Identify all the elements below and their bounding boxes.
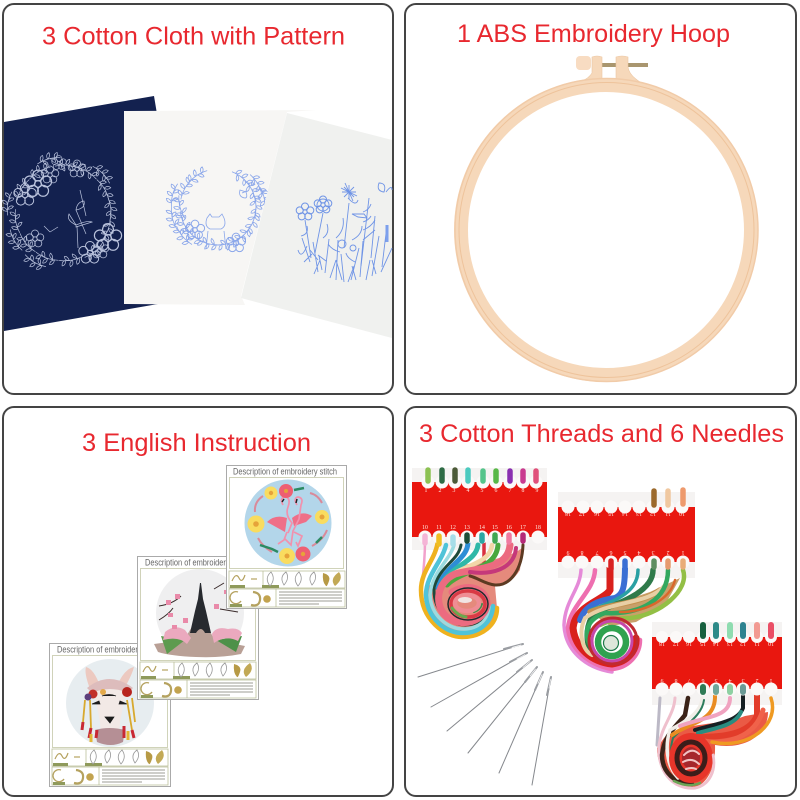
instruction sheet: alpaca: Description of embroidery stitch (57, 644, 161, 656)
needles (418, 644, 551, 785)
instruction sheet: Eiffel tower: Description of embroidery stitch (145, 558, 249, 568)
thread card 3: 13 (727, 640, 733, 646)
heading: embroidery hoop: 1 ABS Embroidery Hoop (457, 20, 730, 48)
thread card 1: 15 (492, 525, 498, 531)
heading: instructions: 3 English Instruction (82, 429, 311, 457)
thread card 1 (412, 468, 547, 637)
panel: threads and needles (405, 407, 796, 796)
thread bundle 2 (564, 566, 684, 672)
thread card 3 (652, 622, 782, 788)
thread card 3: 12 (740, 640, 746, 646)
thread card 2: 1 (681, 549, 684, 555)
thread card 3: 3 (741, 677, 744, 683)
instruction sheet: Eiffel tower (138, 556, 258, 700)
thread card 3: 4 (728, 677, 731, 683)
thread card 3: 8 (674, 677, 677, 683)
thread card 1: 7 (509, 488, 512, 494)
thread card 3: 16 (686, 640, 692, 646)
thread card 1: 16 (506, 525, 512, 531)
panel: instructions (3, 407, 393, 796)
instruction sheet: flamingos: Description of embroidery stitch (233, 466, 337, 478)
navy cloth with wreath (0, 96, 158, 331)
thread card 1: 18 (535, 525, 541, 531)
instruction sheet: alpaca (50, 644, 170, 786)
thread card 2: 13 (636, 510, 642, 516)
thread card 1: 9 (536, 488, 539, 494)
thread card 1: 1 (425, 488, 428, 494)
thread card 3: 7 (687, 677, 690, 683)
thread card 2: 10 (679, 510, 685, 516)
thread card 2: 2 (666, 549, 669, 555)
instruction sheet: flamingos (226, 466, 346, 608)
thread card 3: 5 (714, 677, 717, 683)
thread card 3: 10 (768, 640, 774, 646)
thread card 2: 14 (622, 510, 628, 516)
thread card 3: 2 (755, 677, 758, 683)
thread card 3: 6 (701, 677, 704, 683)
thread card 3: 15 (700, 640, 706, 646)
white cloth with flower garden (241, 113, 392, 338)
thread card 1: 13 (464, 525, 470, 531)
thread bundle 3 (657, 695, 773, 788)
thread card 3: 9 (660, 677, 663, 683)
panel: embroidery hoop (405, 4, 796, 394)
thread card 1: 4 (467, 488, 470, 494)
thread card 3: 14 (713, 640, 719, 646)
panel: cotton cloth (0, 4, 393, 394)
thread card 2: 7 (595, 549, 598, 555)
white cloth with wreath (124, 110, 316, 305)
thread card 2: 16 (594, 510, 600, 516)
thread card 1: 17 (520, 525, 526, 531)
thread card 2: 8 (580, 549, 583, 555)
hoop screw (576, 56, 648, 82)
thread card 1: 10 (422, 525, 428, 531)
thread card 3: 1 (769, 677, 772, 683)
thread card 2: 17 (579, 510, 585, 516)
thread card 2: 12 (650, 510, 656, 516)
thread card 1: 14 (479, 525, 485, 531)
thread card 1: 2 (439, 488, 442, 494)
thread card 3: 18 (659, 640, 665, 646)
thread card 3: 17 (673, 640, 679, 646)
thread card 3: 11 (754, 640, 760, 646)
thread card 2: 18 (565, 510, 571, 516)
thread card 2 (558, 490, 695, 672)
thread card 1: 12 (450, 525, 456, 531)
thread card 2: 4 (637, 549, 640, 555)
thread card 1: 8 (522, 488, 525, 494)
thread card 1: 5 (481, 488, 484, 494)
thread bundle 1 (421, 540, 523, 637)
thread card 1: 3 (453, 488, 456, 494)
thread card 2: 5 (623, 549, 626, 555)
hoop illustration (455, 56, 758, 382)
thread card 2: 9 (566, 549, 569, 555)
thread card 2: 6 (609, 549, 612, 555)
thread card 2: 3 (651, 549, 654, 555)
heading: threads and needles: 3 Cotton Threads and 6 Needles (419, 420, 784, 448)
thread card 2: 15 (608, 510, 614, 516)
heading: cotton cloth: 3 Cotton Cloth with Pattern (42, 22, 345, 50)
thread card 1: 6 (495, 488, 498, 494)
thread card 1: 11 (436, 525, 442, 531)
thread card 2: 11 (665, 510, 671, 516)
